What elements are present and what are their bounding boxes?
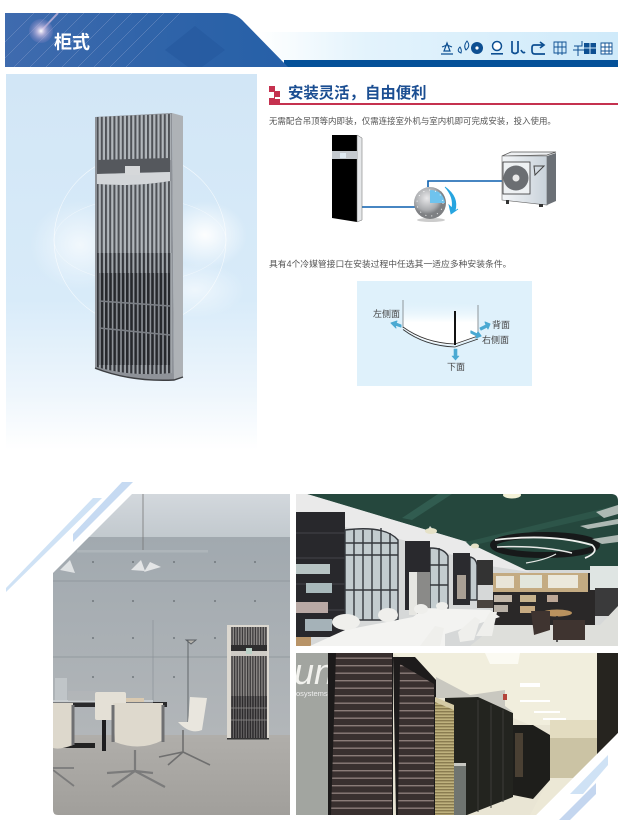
pendant lamps [60, 494, 208, 573]
side wall [436, 677, 513, 712]
black cabinets [445, 697, 550, 815]
ceiling beams and pendant lamps [402, 492, 618, 548]
section heading [269, 84, 618, 105]
right rack edge [597, 653, 618, 755]
diagram: indoor and outdoor connection [332, 135, 556, 222]
bookcases and floor unit [405, 541, 493, 615]
white wall [296, 494, 530, 572]
diagram background [357, 281, 532, 386]
green ceiling [307, 494, 618, 570]
text: installation description: 无需配合吊顶等内即装，仅需连接室外机与室内机即可完成安装，投入使用。 [269, 116, 556, 126]
sun panel: osystems [296, 689, 328, 698]
header navy strip [284, 60, 618, 67]
table and furniture [53, 678, 167, 751]
white chairs [332, 602, 497, 646]
sun panel: un [294, 651, 334, 692]
header blue tab [5, 13, 290, 72]
rotation arrow [445, 187, 458, 214]
back wall [530, 720, 597, 815]
server racks [328, 653, 466, 815]
direction labels: 下面 [447, 362, 465, 372]
ceiling [393, 653, 597, 725]
feature icons row [441, 41, 612, 56]
arrows [391, 321, 490, 360]
outdoor unit [502, 152, 556, 207]
floor-standing unit [95, 113, 183, 380]
photo: meeting room [53, 494, 290, 815]
panel: product photo [6, 74, 257, 450]
white tables [310, 608, 500, 646]
direction labels: 右侧面 [482, 334, 509, 345]
decorative stripes: bottom-right [559, 755, 608, 820]
direction labels: 左侧面 [373, 308, 400, 319]
diagram: pipe connection directions [357, 281, 532, 386]
right background room [590, 566, 618, 616]
tab title: 柜式 [54, 32, 90, 52]
direction labels: 背面 [492, 319, 510, 330]
floor lamp [186, 640, 196, 723]
heading text: 安装灵活，自由便利 [288, 84, 427, 102]
sun panel [296, 653, 328, 815]
decorative stripes: top-left [6, 482, 133, 592]
photo: server room [294, 651, 618, 815]
header gradient band [258, 32, 618, 60]
sphere and cloud background [30, 154, 247, 326]
lattice ceiling panels [580, 505, 618, 544]
header banner [5, 13, 618, 72]
windows [345, 528, 477, 620]
round table and stools [531, 610, 585, 642]
indoor unit [332, 135, 362, 222]
red ceiling device [503, 694, 507, 700]
ring lights [493, 535, 597, 563]
direction labels [373, 308, 510, 372]
photo: library [296, 492, 618, 646]
heading rule [275, 103, 618, 105]
pipe lines [362, 181, 502, 207]
unit outline [403, 300, 478, 347]
bookcase left [296, 512, 345, 646]
heading marker [269, 86, 280, 105]
timer clock [414, 187, 446, 222]
cork board and shelf [493, 573, 595, 625]
text: refrigerant connection description: 具有4个冷媒管接口在安装过程中任选其一适应多种安装条件。 [269, 258, 511, 269]
white chairs [53, 692, 210, 787]
air conditioner unit [227, 625, 269, 740]
